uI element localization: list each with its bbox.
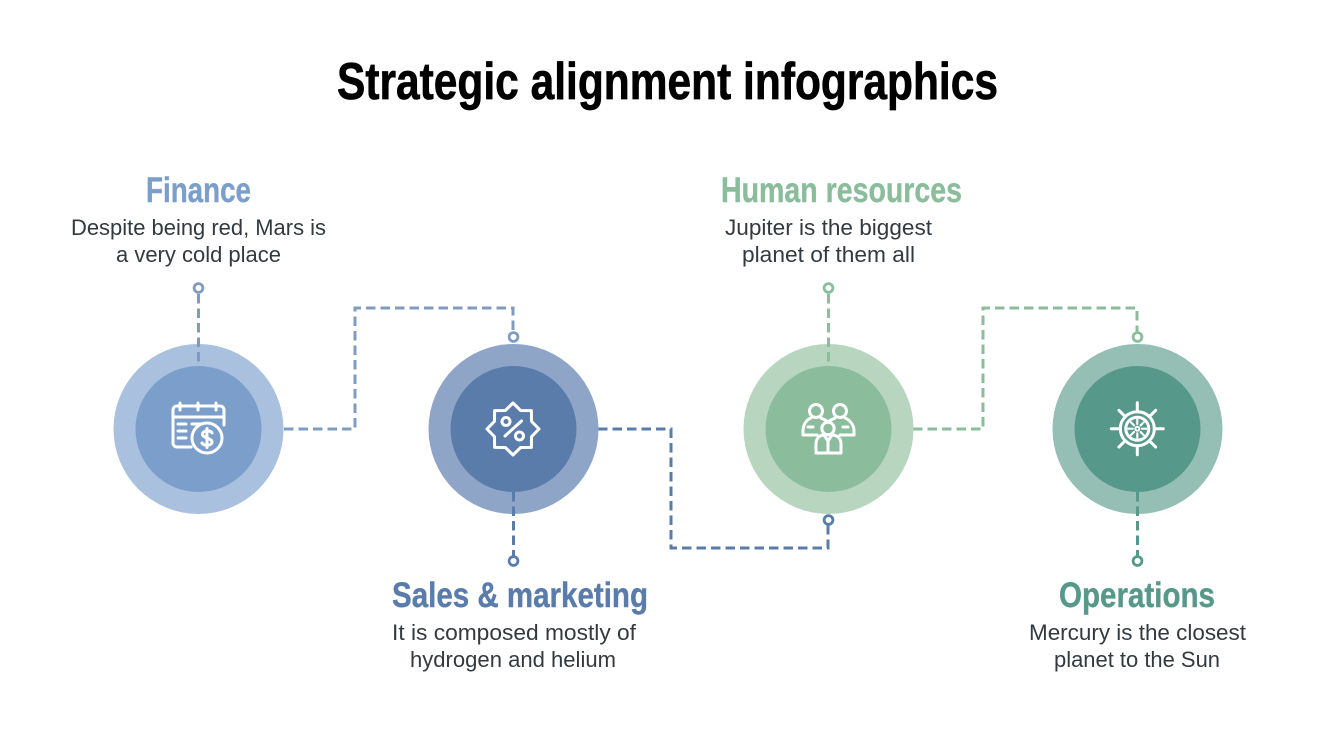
panel: finance xyxy=(71,171,326,514)
operations bottom pin xyxy=(1133,492,1142,565)
human resources bottom pin xyxy=(824,516,833,524)
human resources text xyxy=(725,215,932,267)
operations circle xyxy=(1052,344,1222,514)
panel: sales and marketing xyxy=(392,333,648,672)
connector: human resources to operations xyxy=(913,308,1137,429)
sales text: It is composed mostly of xyxy=(392,620,637,645)
human resources circle xyxy=(744,344,914,514)
sales heading: Sales & marketing xyxy=(392,576,648,615)
panel: operations xyxy=(1029,333,1246,672)
sales circle xyxy=(428,344,598,514)
finance text: a very cold place xyxy=(116,242,281,267)
finance circle xyxy=(114,344,284,514)
human resources text: planet of them all xyxy=(742,242,915,267)
icon: percent badge xyxy=(487,403,539,455)
finance text: Despite being red, Mars is xyxy=(71,215,326,240)
connector: sales to human resources xyxy=(598,429,828,548)
finance text xyxy=(71,215,326,267)
operations top pin xyxy=(1133,333,1142,341)
sales top pin xyxy=(509,333,518,341)
human resources heading: Human resources xyxy=(721,171,962,210)
operations text: planet to the Sun xyxy=(1054,647,1220,672)
finance heading: Finance xyxy=(146,171,251,210)
human resources top pin xyxy=(824,284,833,366)
sales bottom pin xyxy=(509,492,518,565)
icon: people xyxy=(803,404,854,453)
sales text: hydrogen and helium xyxy=(410,647,616,672)
operations text xyxy=(1029,620,1246,672)
connector: finance to sales xyxy=(284,308,513,429)
human resources text: Jupiter is the biggest xyxy=(725,215,932,240)
icon: ship wheel xyxy=(1111,403,1163,455)
finance pin xyxy=(194,284,203,366)
icon: calendar with dollar xyxy=(173,403,224,453)
panel: human resources xyxy=(721,171,962,524)
title: Strategic alignment infographics xyxy=(337,53,998,111)
operations heading: Operations xyxy=(1059,576,1215,615)
sales text xyxy=(392,620,637,672)
operations text: Mercury is the closest xyxy=(1029,620,1246,645)
